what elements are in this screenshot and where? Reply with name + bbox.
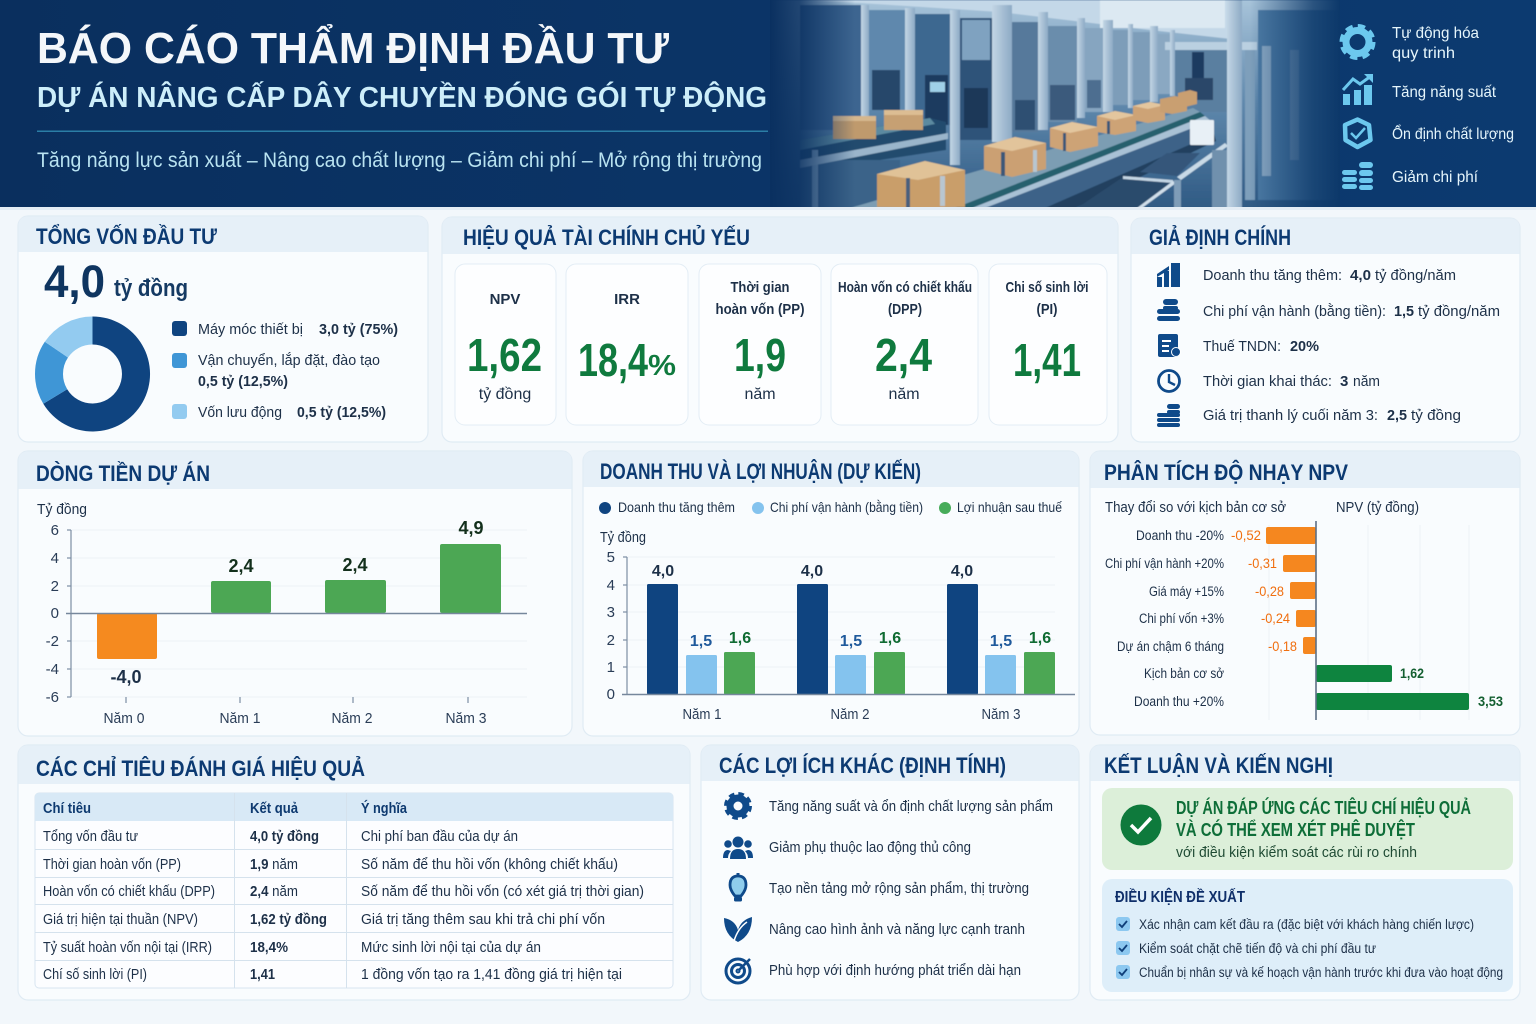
row: tax: 20% (1290, 338, 1319, 355)
legend: transport: 0,5 tỷ (12,5%) (198, 373, 288, 390)
card: NPV: tỷ đồng (479, 386, 531, 403)
card: profitability index: 1,41 (1013, 334, 1081, 386)
column captions (1105, 499, 1419, 516)
cash flow bar chart: 0 (51, 605, 59, 622)
total amount: 4,0 (44, 256, 105, 307)
label: automation: quy trinh (1392, 45, 1455, 62)
factory conveyor scene (770, 0, 1340, 208)
grouped bar chart: 4,0 (652, 563, 674, 580)
donut chart (35, 316, 150, 432)
icon: gear (726, 794, 750, 818)
cardboard boxes (833, 118, 876, 139)
row: operating cost (1203, 303, 1500, 320)
icon: check circle (1120, 804, 1162, 846)
cash flow bar chart: -4,0 (110, 667, 142, 687)
indicators table: Giá trị tăng thêm sau khi trả chi phí vốn (361, 912, 605, 928)
legend: machinery: 3,0 tỷ (75%) (319, 321, 398, 338)
legend: transport (172, 352, 380, 390)
card: payback period: năm (744, 386, 776, 403)
cash flow bar chart: Năm 3 (446, 710, 486, 727)
card: IRR: % (648, 350, 676, 382)
card: profitability index: (PI) (1036, 301, 1058, 318)
legend: transport: Vận chuyển, lắp đặt, đào tạo (198, 352, 380, 369)
white carton (1190, 120, 1214, 145)
callout: approval (1102, 788, 1513, 870)
label: productivity: Tăng năng suất (1392, 84, 1497, 101)
legend: machinery: Máy móc thiết bị (198, 321, 303, 338)
panel: evaluation indicators (18, 745, 690, 1000)
card: IRR (566, 264, 688, 425)
cash flow bar chart: Năm 0 (104, 710, 144, 727)
panel: conclusion (1090, 745, 1520, 1000)
sensitivity bar chart (1105, 521, 1503, 720)
grouped bar chart: Năm 2 (830, 706, 870, 723)
panel: total investment (18, 216, 428, 442)
column captions: Thay đổi so với kịch bản cơ sở (1105, 499, 1286, 516)
heading: CÁC CHỈ TIÊU ĐÁNH GIÁ HIỆU QUẢ (36, 756, 365, 781)
sensitivity bar chart: -0,18 (1268, 638, 1297, 654)
grouped bar chart: 3 (607, 604, 615, 621)
heading: PHÂN TÍCH ĐỘ NHẠY NPV (1104, 460, 1348, 485)
chart legend: Chi phí vận hành (bằng tiền) (770, 499, 923, 515)
grouped bar chart: 0 (607, 686, 615, 703)
total amount (44, 256, 188, 307)
cash flow bar chart: Năm 2 (332, 710, 372, 727)
icon: leaf (724, 917, 752, 942)
card: profitability index (989, 264, 1107, 425)
indicators table: Số năm để thu hồi vốn (có xét giá trị thời gian) (361, 884, 644, 900)
left conveyor and machines (802, 118, 946, 161)
callout: approval: VÀ CÓ THỂ XEM XÉT PHÊ DUYỆT (1176, 819, 1415, 840)
conveyor belt (850, 108, 1200, 208)
indicators table (35, 793, 673, 988)
legend: machinery (172, 321, 398, 338)
icon: rising chart (1343, 74, 1373, 105)
card: payback period: 1,9 (734, 329, 786, 381)
cash flow bar chart: -4 (46, 661, 59, 678)
grouped bar chart: 1,6 (879, 630, 901, 647)
cash flow bar chart (37, 501, 527, 727)
row: revenue: tỷ đồng/năm (1375, 267, 1456, 284)
card: discounted payback: 2,4 (875, 329, 932, 381)
grouped bar chart: 1,5 (840, 633, 862, 650)
sensitivity bar chart: Giá máy +15% (1149, 584, 1224, 599)
header banner (0, 0, 1536, 210)
grouped bar chart: 2 (607, 632, 615, 649)
header divider (37, 130, 768, 132)
benefit 1: Tăng năng suất và ổn định chất lượng sản phẩm (769, 798, 1053, 815)
row: operating period: 3 (1340, 373, 1348, 390)
grouped bar chart: 1,6 (1029, 630, 1051, 647)
indicators table: 2,4 năm (250, 884, 298, 900)
subtitle: DỰ ÁN NÂNG CẤP DÂY CHUYỀN ĐÓNG GÓI TỰ ĐỘNG (37, 80, 767, 114)
sensitivity bar chart: 3,53 (1478, 693, 1503, 709)
card: profitability index: Chi số sinh lời (1006, 279, 1088, 296)
lower tables (1078, 178, 1170, 207)
sensitivity bar chart: Doanh thu -20% (1136, 528, 1224, 543)
indicators table: 1,62 tỷ đồng (250, 912, 327, 928)
legend: working capital (172, 404, 386, 421)
icon: coin stack (1157, 404, 1180, 427)
callout: proposed conditions (1102, 879, 1513, 992)
grouped bar chart: 4,0 (801, 563, 823, 580)
sensitivity bar chart: -0,28 (1255, 583, 1284, 599)
row: operating cost: tỷ đồng/năm (1418, 303, 1500, 320)
icon: tax document (1158, 334, 1180, 357)
indicators table: Chi phí ban đầu của dự án (361, 829, 518, 845)
heading: DÒNG TIỀN DỰ ÁN (36, 461, 210, 486)
grouped bar chart: 1,5 (690, 633, 712, 650)
row: operating cost: 1,5 (1394, 303, 1414, 320)
legend: working capital: Vốn lưu động (198, 404, 282, 421)
card: discounted payback: (DPP) (888, 301, 922, 318)
icon: target (726, 959, 750, 983)
grouped bar chart: 1 (607, 659, 615, 676)
card: payback period: Thời gian (730, 279, 790, 296)
icon: bars (1157, 263, 1180, 287)
sensitivity bar chart: Dự án chậm 6 tháng (1117, 639, 1224, 654)
row: operating period: Thời gian khai thác: (1203, 373, 1332, 390)
icon: quality shield (1345, 120, 1370, 147)
tagline: Tăng năng lực sản xuất – Nâng cao chất lượng – Giảm chi phí – Mở rộng thị trường (37, 149, 762, 172)
label: cost: Giảm chi phí (1392, 169, 1479, 186)
indicators table: 1 đồng vốn tạo ra 1,41 đồng giá trị hiện tại (361, 967, 622, 983)
cash flow bar chart: 2,4 (228, 556, 254, 576)
callout: proposed conditions: ĐIỀU KIỆN ĐỀ XUẤT (1115, 888, 1245, 906)
row: revenue (1203, 267, 1456, 284)
heading: TỔNG VỐN ĐẦU TƯ (36, 223, 218, 249)
checklist item 2: Kiểm soát chặt chẽ tiến độ và chi phí đầu tư (1139, 941, 1376, 956)
sensitivity bar chart: -0,52 (1231, 527, 1261, 543)
cash flow bar chart: 2 (51, 578, 59, 595)
panel: project cash flow (18, 451, 572, 736)
indicators table: 1,9 năm (250, 857, 298, 873)
panel: qualitative benefits (701, 745, 1079, 1000)
callout: approval: với điều kiện kiểm soát các rùi ro chính (1176, 844, 1417, 861)
indicators table: Thời gian hoàn vốn (PP) (43, 857, 181, 873)
sensitivity bar chart: Kịch bản cơ sở (1144, 666, 1224, 681)
card: discounted payback (831, 264, 978, 425)
card: discounted payback: năm (888, 386, 920, 403)
card: NPV: 1,62 (467, 329, 542, 381)
chart legend: Lợi nhuận sau thuế (957, 499, 1062, 515)
row: salvage value: tỷ đồng (1411, 407, 1461, 424)
card: payback period: hoàn vốn (PP) (716, 301, 804, 318)
label: automation (1392, 25, 1479, 62)
benefit 2: Giảm phụ thuộc lao động thủ công (769, 839, 971, 856)
cash flow bar chart: 4 (51, 550, 59, 567)
cash flow bar chart: 4,9 (458, 518, 484, 538)
row: operating period: năm (1353, 373, 1380, 390)
card: NPV (455, 264, 556, 425)
benefit 4: Nâng cao hình ảnh và năng lực cạnh tranh (769, 921, 1025, 938)
benefit 3: Tạo nền tảng mở rộng sản phẩm, thị trường (769, 880, 1029, 897)
table header (43, 799, 408, 817)
chart legend (599, 499, 1062, 515)
legend: working capital: 0,5 tỷ (12,5%) (297, 404, 386, 421)
grouped bar chart (600, 529, 1075, 723)
panel: key financial metrics (442, 217, 1118, 442)
cash flow bar chart: -6 (46, 689, 59, 706)
heading: HIỆU QUẢ TÀI CHÍNH CHỦ YẾU (463, 225, 750, 250)
sensitivity bar chart: Doanh thu +20% (1134, 694, 1224, 709)
grouped bar chart: Năm 3 (982, 706, 1020, 723)
table header: Ý nghĩa (361, 799, 408, 817)
sensitivity bar chart: -0,24 (1261, 610, 1290, 626)
heading: DOANH THU VÀ LỢI NHUẬN (DỰ KIẾN) (600, 459, 921, 484)
panel: key assumptions (1131, 218, 1520, 442)
indicators table: Giá trị hiện tại thuần (NPV) (43, 912, 198, 928)
grouped bar chart: 1,5 (990, 633, 1012, 650)
icon: gear (1342, 26, 1373, 58)
sensitivity bar chart: Chi phí vốn +3% (1139, 611, 1224, 626)
heading: KẾT LUẬN VÀ KIẾN NGHỊ (1104, 753, 1333, 778)
indicators table: Mức sinh lời nội tại của dự án (361, 940, 541, 956)
indicators table: Chí số sinh lời (PI) (43, 967, 147, 983)
heading: CÁC LỢI ÍCH KHÁC (ĐỊNH TÍNH) (719, 753, 1006, 778)
row: salvage value: 2,5 (1387, 407, 1407, 424)
grouped bar chart: 5 (607, 549, 615, 566)
callout: approval: DỰ ÁN ĐÁP ỨNG CÁC TIÊU CHÍ HIỆU QUẢ (1176, 797, 1471, 818)
label: automation: Tự động hóa (1392, 25, 1479, 42)
heading: GIẢ ĐỊNH CHÍNH (1149, 225, 1291, 250)
benefit 5: Phù hợp với định hướng phát triển dài hạn (769, 962, 1021, 979)
icon: coins (1157, 299, 1180, 321)
icon: coins (1342, 162, 1373, 190)
row: salvage value: Giá trị thanh lý cuối năm 3: (1203, 407, 1378, 424)
indicators table: Tỷ suất hoàn vốn nội tại (IRR) (43, 940, 212, 956)
card: payback period (699, 264, 821, 425)
checklist item 1: Xác nhận cam kết đầu ra (đặc biệt với khách hàng chiến lược) (1139, 917, 1474, 932)
cash flow bar chart: -2 (46, 633, 59, 650)
cash flow bar chart: Tỷ đồng (37, 501, 87, 518)
indicators table: Số năm để thu hồi vốn (không chiết khấu) (361, 857, 618, 873)
grouped bar chart: 4,0 (951, 563, 973, 580)
icon: clock (1158, 370, 1180, 392)
column captions: NPV (tỷ đồng) (1336, 499, 1419, 516)
cash flow bar chart: Năm 1 (220, 710, 260, 727)
indicators table: 4,0 tỷ đồng (250, 829, 319, 845)
card: IRR: IRR (614, 291, 640, 308)
icon: light bulb (730, 873, 746, 902)
grouped bar chart: Tỷ đồng (600, 529, 646, 546)
table header: Chí tiêu (43, 801, 91, 817)
indicators table: 18,4% (250, 940, 288, 956)
header feature list (1342, 25, 1514, 190)
title: BÁO CÁO THẨM ĐỊNH ĐẦU TƯ (37, 22, 669, 73)
row: tax: Thuế TNDN: (1203, 338, 1281, 355)
grouped bar chart: 1,6 (729, 630, 751, 647)
sensitivity bar chart: 1,62 (1400, 665, 1424, 681)
row: salvage value (1203, 407, 1461, 424)
icon: people (723, 836, 753, 859)
sensitivity bar chart: Chi phí vận hành +20% (1105, 556, 1224, 571)
panel: revenue and profit (583, 451, 1079, 736)
card: IRR: 18,4 (578, 334, 648, 386)
indicators table: Tổng vốn đầu tư (43, 829, 138, 845)
sensitivity bar chart: -0,31 (1248, 555, 1277, 571)
table header: Kết quả (250, 801, 299, 817)
card: NPV: NPV (490, 291, 520, 308)
total amount: tỷ đồng (114, 275, 188, 302)
cash flow bar chart: 2,4 (342, 555, 368, 575)
grouped bar chart: Năm 1 (682, 706, 722, 723)
chart legend: Doanh thu tăng thêm (618, 499, 735, 515)
row: revenue: 4,0 (1350, 267, 1371, 284)
cash flow bar chart: 6 (51, 522, 59, 539)
indicators table: 1,41 (250, 967, 275, 983)
row: revenue: Doanh thu tăng thêm: (1203, 267, 1342, 284)
card: discounted payback: Hoàn vốn có chiết khấu (838, 279, 972, 296)
indicators table: Hoàn vốn có chiết khấu (DPP) (43, 884, 215, 900)
panel: NPV sensitivity (1090, 451, 1520, 735)
row: operating cost: Chi phí vận hành (bằng tiền): (1203, 303, 1386, 320)
grouped bar chart: 4 (607, 577, 615, 594)
label: quality: Ổn định chất lượng (1392, 124, 1514, 143)
